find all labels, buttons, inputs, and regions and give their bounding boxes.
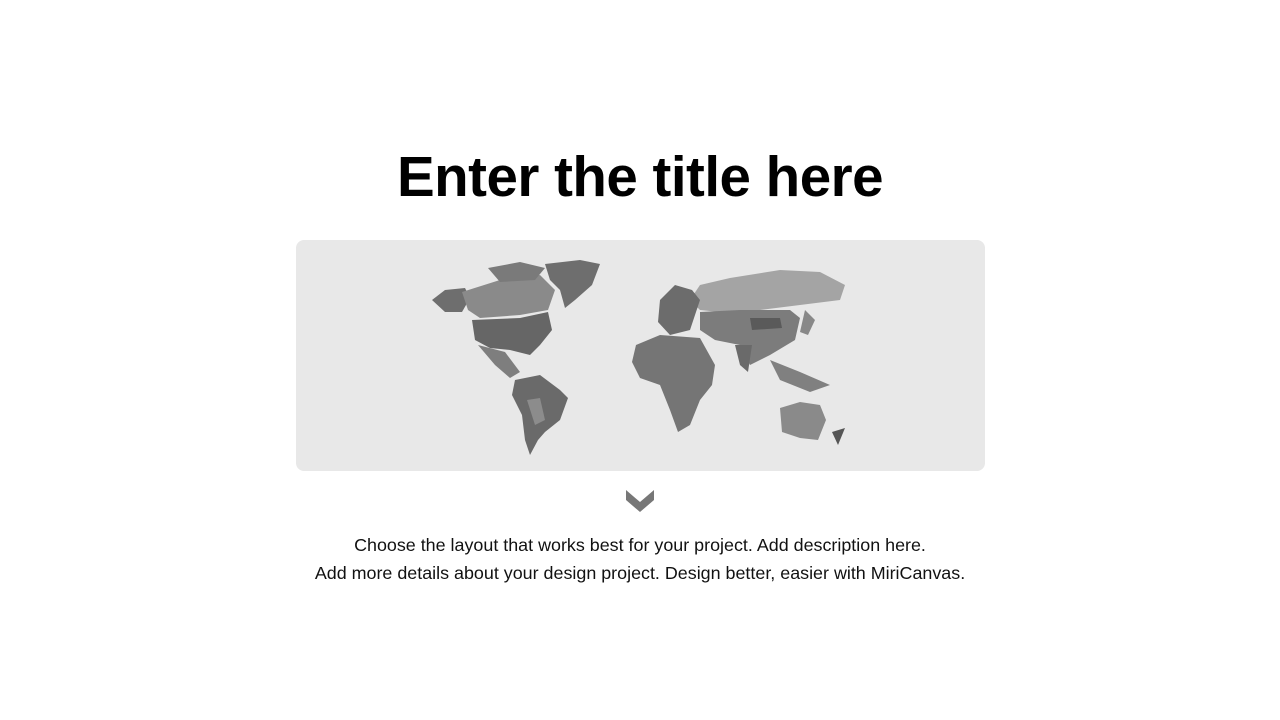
- map: greenland: [545, 260, 600, 308]
- map: australia: [780, 402, 845, 445]
- map: africa: [632, 335, 715, 432]
- panel: world map: [296, 240, 985, 471]
- map: south america: [512, 375, 568, 455]
- title: Enter the title here: [397, 145, 883, 208]
- description text: Choose the layout that works best for your project. Add description here.: [354, 535, 926, 555]
- icon: chevron down: [626, 490, 654, 512]
- description text: Add more details about your design project. Design better, easier with MiriCanvas.: [315, 563, 965, 583]
- map: north america: [432, 262, 555, 378]
- description text: [314, 535, 965, 583]
- map: eurasia: [658, 270, 845, 392]
